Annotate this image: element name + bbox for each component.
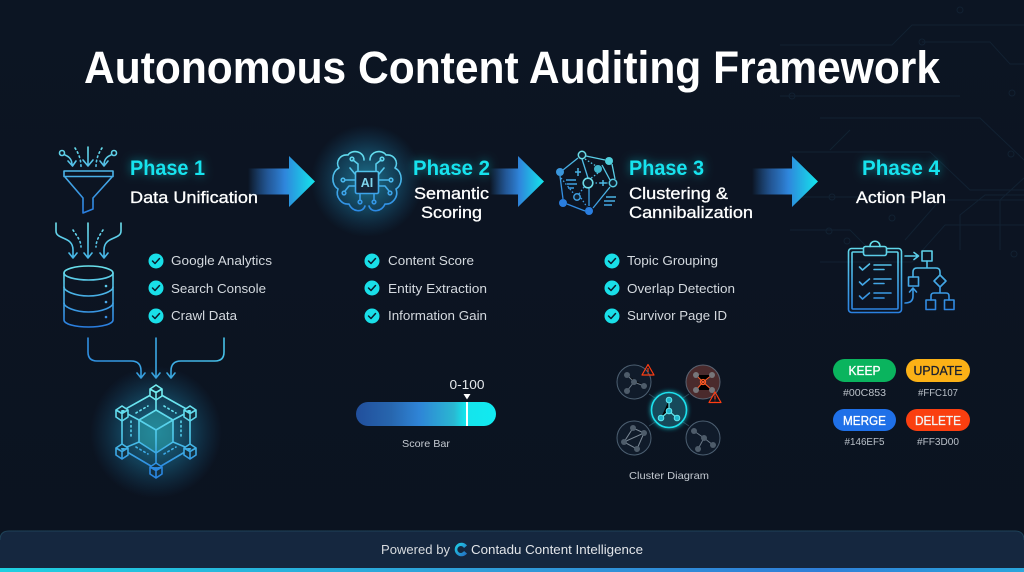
cluster: top left <box>617 365 651 399</box>
phase 2 heading: Phase 2 <box>413 157 490 180</box>
arrow: phase 2 to 3 <box>490 156 544 207</box>
phase 2 column <box>311 125 496 450</box>
footer <box>0 531 1024 572</box>
phase 1 subtitle: Data Unification <box>130 188 258 207</box>
action: merge <box>833 409 896 448</box>
phase 3 subtitle: Clustering & <box>629 184 729 203</box>
icon: AI brain <box>311 125 423 237</box>
action: merge: #146EF5 <box>844 437 885 448</box>
phase 1 checklist: Crawl Data <box>171 308 238 323</box>
icon: database <box>64 266 113 327</box>
footer text: brand: Contadu Content Intelligence <box>471 543 643 557</box>
phase 2 subtitle: Semantic <box>414 184 490 203</box>
score bar: Score Bar <box>402 438 451 450</box>
score bar <box>356 377 496 450</box>
arrow: phase 3 to 4 <box>752 156 818 207</box>
action: delete: DELETE <box>915 414 961 428</box>
icon: clipboard and flowchart <box>848 241 954 312</box>
warning: top left <box>642 364 654 375</box>
action: update: UPDATE <box>914 364 962 378</box>
cluster: top right overlap <box>686 365 720 399</box>
phase 3 heading: Phase 3 <box>629 157 704 180</box>
phase 2 checklist <box>364 253 487 324</box>
title: Autonomous Content Auditing Framework <box>84 42 941 93</box>
phase 4 column <box>833 157 970 448</box>
action: delete <box>906 409 970 448</box>
cluster: bottom left <box>617 421 651 455</box>
phase 3 checklist <box>604 253 735 324</box>
action: keep: KEEP <box>848 364 880 378</box>
icon: network <box>556 151 617 215</box>
action: update <box>906 359 970 399</box>
footer text: powered by: Powered by <box>381 543 451 557</box>
icon: merging arrows <box>56 223 121 258</box>
phase 3 column <box>556 151 753 482</box>
phase 3 subtitle: Cannibalization <box>629 203 753 222</box>
action: update: #FFC107 <box>918 388 958 399</box>
icon: contadu logo <box>455 543 467 556</box>
score bar: 0-100 <box>450 377 484 392</box>
phase 3 subtitle <box>629 184 753 222</box>
arrow: phase 1 to 2 <box>248 156 315 207</box>
warning: top right <box>709 392 721 402</box>
phase 2 checklist: Content Score <box>388 253 474 268</box>
phase 2 checklist: Information Gain <box>388 308 487 323</box>
phase 1 column <box>56 147 273 498</box>
phase 4 subtitle: Action Plan <box>856 188 946 207</box>
phase 1 checklist: Search Console <box>171 281 266 296</box>
phase 2 checklist: Entity Extraction <box>388 281 487 296</box>
action: merge: MERGE <box>843 414 886 428</box>
action: delete: #FF3D00 <box>917 437 959 448</box>
phase 3 checklist: Survivor Page ID <box>627 308 727 323</box>
cluster diagram <box>617 364 721 482</box>
action: keep <box>833 359 896 399</box>
cluster: survivor centre <box>652 392 686 428</box>
phase 3 checklist: Overlap Detection <box>627 281 735 296</box>
icon: converging arrows <box>88 338 224 378</box>
phase 2 subtitle <box>414 184 490 222</box>
phase 4 heading: Phase 4 <box>862 157 940 180</box>
phase 1 checklist: Google Analytics <box>171 253 273 268</box>
cluster: bottom right <box>686 421 720 455</box>
icon: unified data cube <box>90 366 222 498</box>
phase 2 subtitle: Scoring <box>421 203 482 222</box>
phase 1 heading: Phase 1 <box>130 157 205 180</box>
phase 1 checklist <box>148 253 273 324</box>
icon: funnel <box>60 147 116 213</box>
action: keep: #00C853 <box>843 388 886 399</box>
cluster caption: Cluster Diagram <box>629 470 709 482</box>
icon: AI brain: AI <box>361 176 373 190</box>
phase 3 checklist: Topic Grouping <box>627 253 718 268</box>
